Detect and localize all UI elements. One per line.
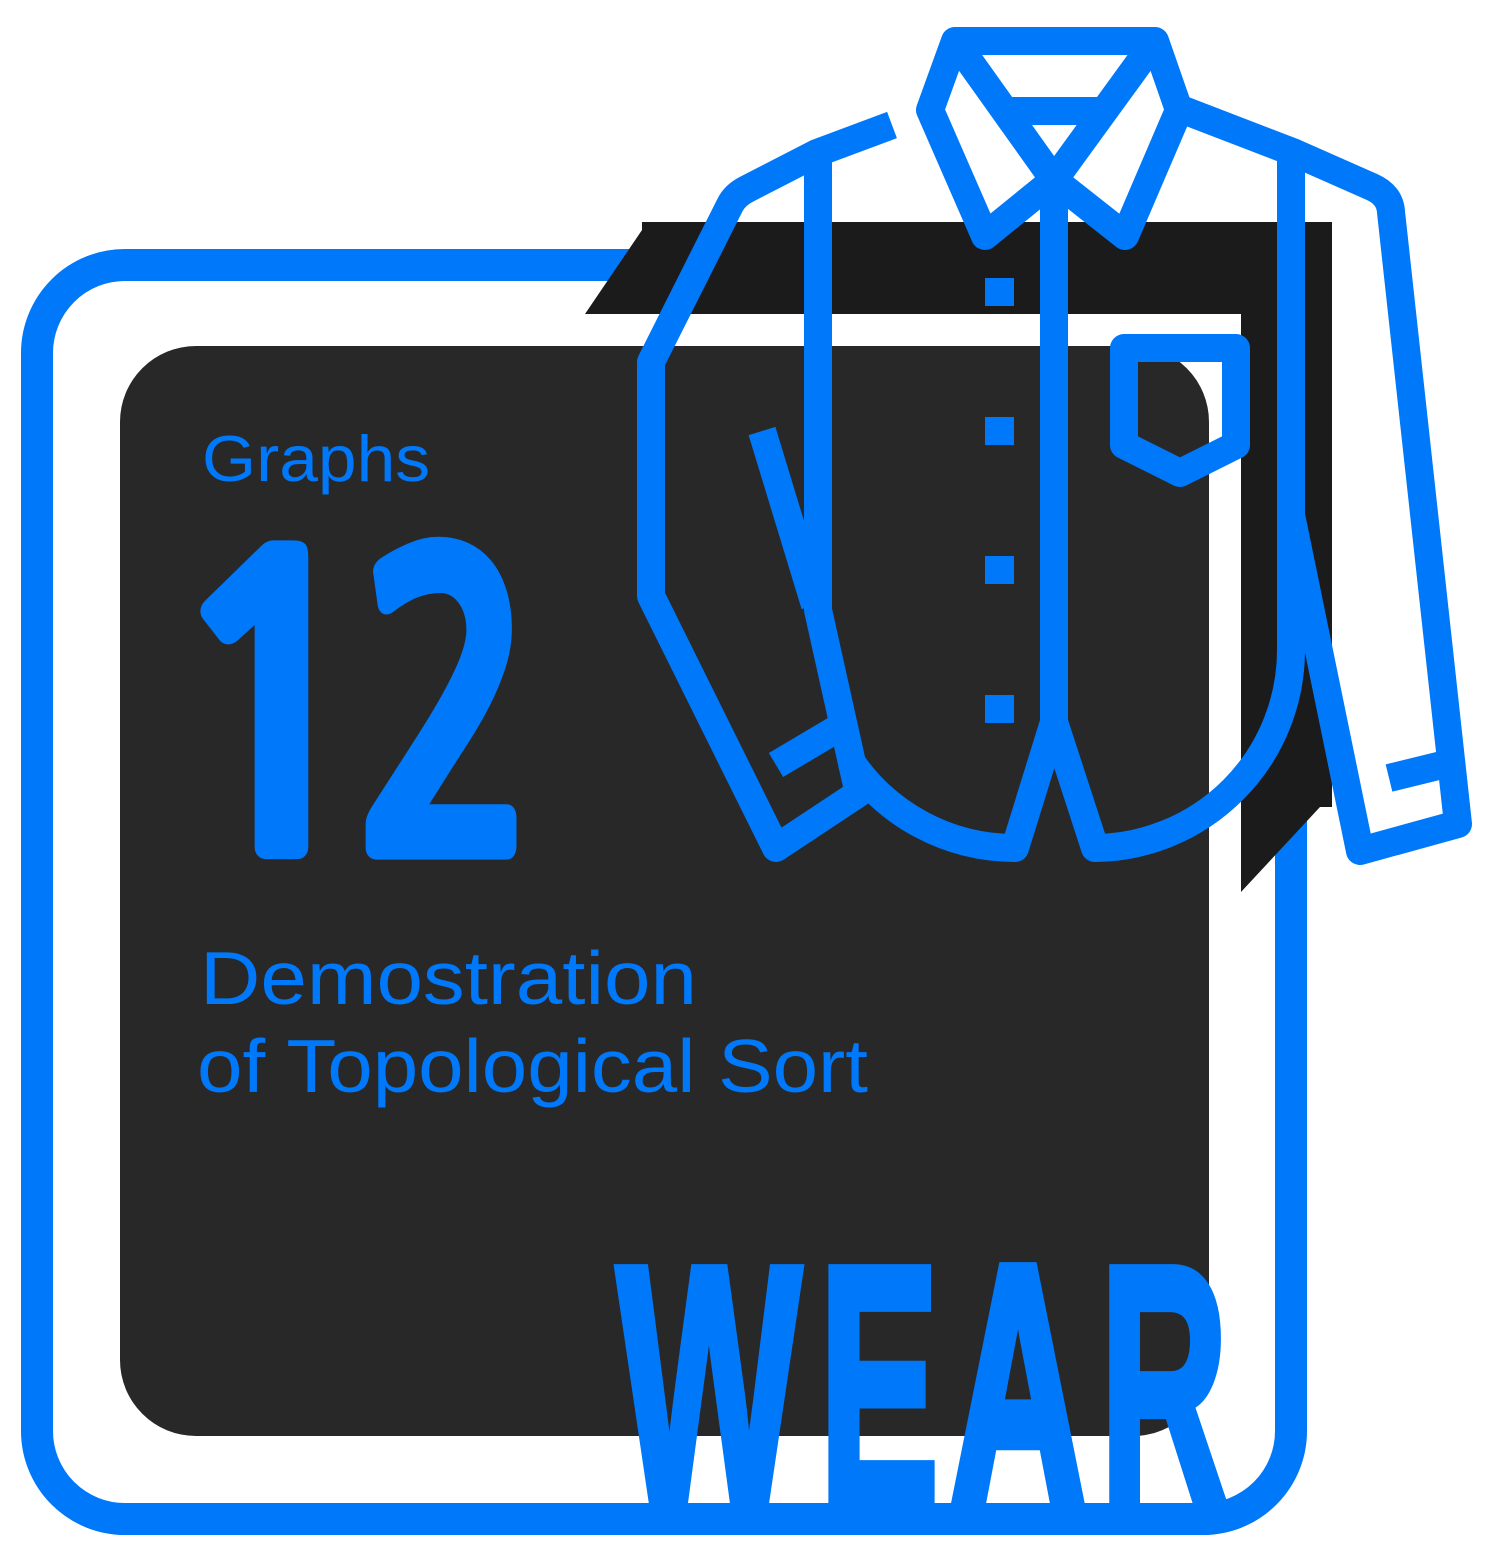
left shoulder and sleeve outline xyxy=(651,125,892,848)
left sleeve inner line xyxy=(762,431,815,605)
left body side seam xyxy=(818,153,858,790)
button placket xyxy=(1040,185,1068,725)
big number 12: 1 xyxy=(158,514,388,911)
collar outline xyxy=(930,41,1179,236)
blue rounded outer frame xyxy=(37,265,1291,1519)
right cuff xyxy=(1389,765,1442,778)
description text xyxy=(197,936,868,1108)
right body seam and hem xyxy=(850,153,1291,848)
shirt buttons xyxy=(985,278,1014,723)
collar fold lines xyxy=(955,41,1155,180)
black offset corner shape xyxy=(585,222,1332,892)
right shoulder and sleeve outline xyxy=(1178,108,1458,851)
category label: Graphs: Graphs xyxy=(202,422,430,495)
description text: Demostration xyxy=(200,936,697,1020)
pocket xyxy=(1124,348,1236,473)
icon: shirt xyxy=(651,41,1458,851)
dark inner panel xyxy=(120,346,1209,1436)
left cuff xyxy=(776,730,835,765)
big number 12: 2 xyxy=(354,514,539,911)
description text: of Topological Sort xyxy=(197,1024,868,1108)
